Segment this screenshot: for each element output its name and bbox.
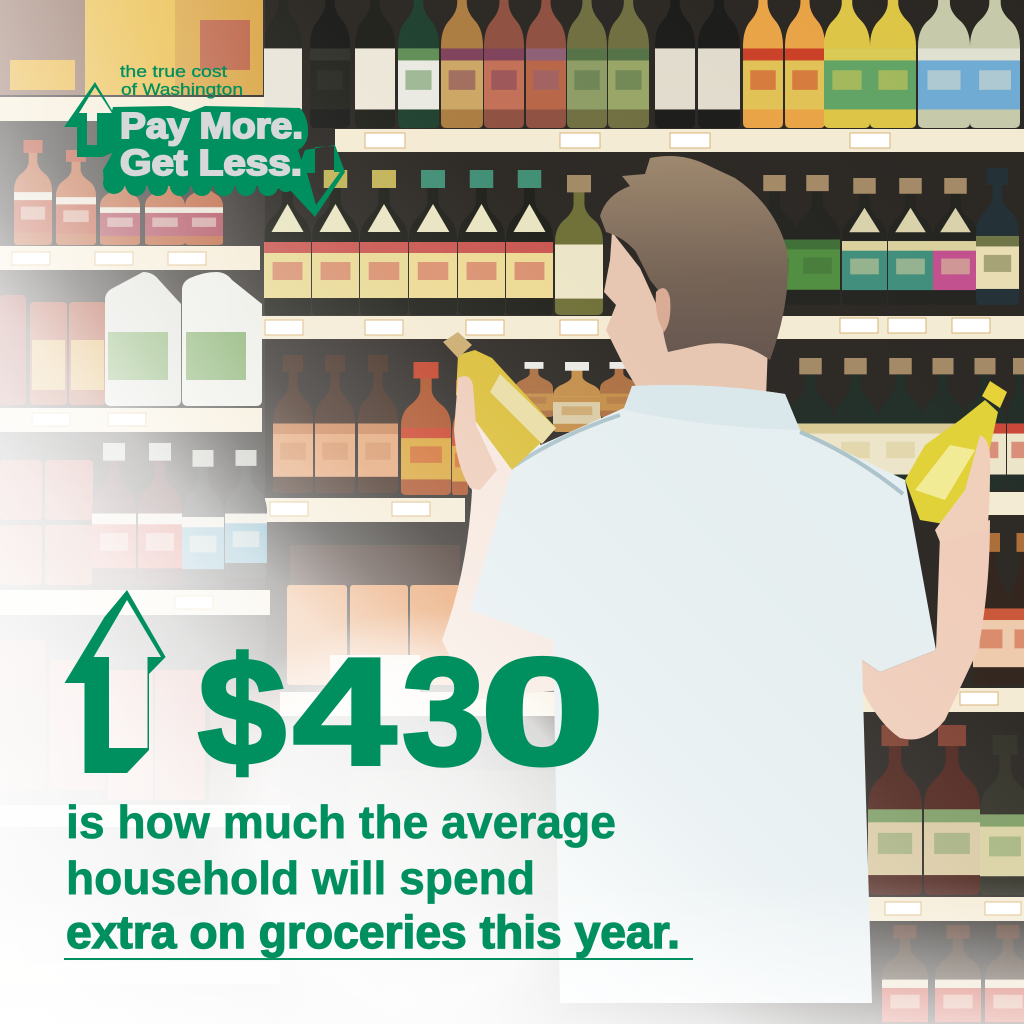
bottles: top row [264, 0, 1020, 128]
hair [600, 156, 788, 360]
logo title [120, 105, 303, 183]
apple cider vinegar lower centre [287, 545, 460, 710]
left-side fade [0, 0, 265, 1024]
bottles: row behind right shoulder [788, 358, 1024, 490]
neck and face [604, 232, 768, 398]
stat description: household will spend [66, 852, 535, 904]
left-hand oil bottle [443, 332, 556, 470]
logo: the true cost of Washington, Pay More. Get Less.: of Washington [121, 80, 243, 99]
bottles: right lower [868, 533, 1024, 1024]
right arm [862, 520, 990, 740]
large up arrow icon [64, 590, 166, 773]
right hand [935, 435, 990, 542]
left hand fingers [454, 376, 497, 490]
lower left pasta sauce jars [0, 640, 570, 890]
man seen from behind, holding two oil bottles [442, 156, 1007, 1003]
big stat: $430: 3 [402, 627, 485, 797]
bottom fade [0, 880, 1024, 1024]
left arm [442, 400, 560, 700]
ear [656, 288, 670, 332]
polo shirt [470, 385, 936, 1003]
stat description [66, 796, 680, 958]
soft white patch behind the text over the dark centre shelves [190, 610, 650, 1024]
jars and sauces lower left [0, 443, 267, 585]
logo: the true cost of Washington, Pay More. Get Less. [64, 62, 345, 217]
jars and jugs left [0, 272, 262, 406]
shoulder seams [514, 415, 903, 494]
collar [624, 385, 800, 430]
bottles: Borges row [264, 168, 1019, 315]
top-left cereal boxes [0, 0, 263, 95]
big stat: $430: 4 [293, 627, 396, 797]
bottles: Thai sauces left [14, 140, 223, 245]
logo title: Get Less. [120, 142, 302, 183]
logo green blob [103, 106, 308, 196]
emphasised line: extra on groceries this year. [66, 906, 680, 958]
logo up arrow [64, 82, 120, 157]
big stat: $430: $ [198, 627, 286, 797]
right-hand oil bottle [905, 381, 1007, 525]
bottles: vinegar centre row [273, 355, 638, 495]
big stat: $430 [198, 627, 605, 797]
underline [64, 958, 693, 960]
logo down arrow [290, 145, 345, 217]
logo title: Pay More. [120, 105, 303, 146]
stat description: is how much the average [66, 796, 616, 848]
tagline: the true cost [120, 62, 227, 81]
big stat: $430: 0 [480, 627, 605, 797]
